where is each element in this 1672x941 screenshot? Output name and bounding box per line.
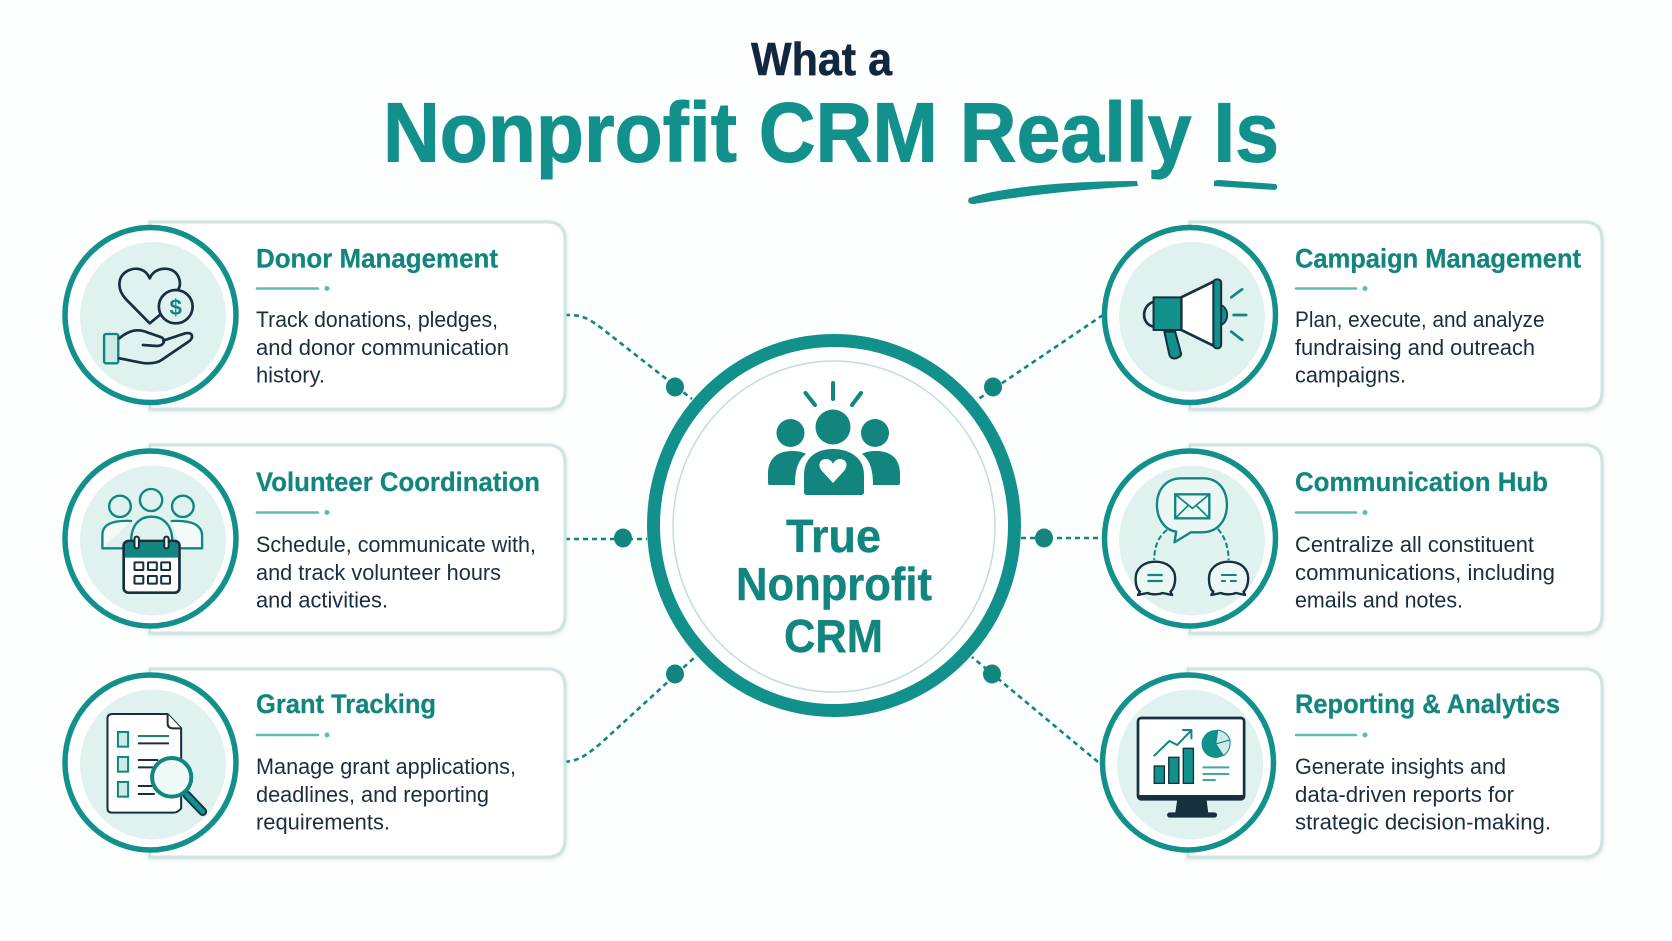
connector lines: [565, 315, 1103, 762]
icon: heart, coin and hand: [104, 269, 193, 363]
description: strategic decision-making.: [1295, 810, 1551, 834]
description: [1295, 532, 1555, 612]
description: campaigns.: [1295, 362, 1406, 388]
badge circle: [65, 675, 236, 850]
icon: people with heart: [768, 383, 900, 495]
heading: Campaign Management: [1295, 244, 1581, 274]
icon: volunteers and calendar: [102, 489, 202, 593]
card: [1188, 669, 1602, 857]
icon: heart, coin and hand: $: [170, 295, 182, 320]
badge circle: [1104, 451, 1276, 626]
description: and activities.: [256, 588, 388, 612]
hub inner ring: [673, 361, 995, 692]
description: communications, including: [1295, 560, 1555, 585]
central hub: [654, 340, 1014, 710]
description: and track volunteer hours: [256, 560, 501, 585]
description: Plan, execute, and analyze: [1295, 307, 1544, 332]
description: [256, 532, 536, 612]
badge circle: [1102, 675, 1274, 850]
description: Generate insights and: [1295, 754, 1506, 779]
hub outer ring: [654, 340, 1014, 710]
divider: [1296, 732, 1368, 738]
panel: campaign management: [1104, 222, 1602, 409]
badge tint: [80, 242, 226, 392]
divider: [257, 510, 330, 515]
heading: Reporting & Analytics: [1295, 689, 1560, 719]
description: [1295, 307, 1544, 388]
description: [256, 307, 509, 388]
description: data-driven reports for: [1295, 782, 1514, 807]
hub label: CRM: [784, 610, 883, 662]
description: history.: [256, 362, 325, 388]
icon: message bubbles: [1136, 478, 1248, 595]
badge tint: [80, 466, 226, 616]
badge tint: [1119, 466, 1265, 616]
card: [150, 222, 565, 409]
heading: Donor Management: [256, 244, 498, 274]
description: fundraising and outreach: [1295, 335, 1535, 360]
divider: [1296, 286, 1368, 291]
description: and donor communication: [256, 335, 509, 360]
badge tint: [1119, 242, 1265, 392]
panel: donor management: [65, 222, 565, 409]
hub label: Nonprofit: [736, 558, 932, 610]
description: Centralize all constituent: [1295, 532, 1535, 557]
badge circle: [1104, 228, 1276, 402]
divider: [257, 286, 330, 291]
heading: Volunteer Coordination: [256, 467, 540, 497]
title underline brush stroke: [968, 180, 1277, 204]
description: deadlines, and reporting: [256, 782, 489, 807]
description: [1295, 754, 1551, 834]
badge circle: [65, 228, 236, 402]
description: emails and notes.: [1295, 588, 1463, 612]
heading: Grant Tracking: [256, 689, 436, 719]
panel: communication hub: [1104, 445, 1602, 633]
card: [1190, 445, 1602, 633]
divider: [1296, 510, 1368, 515]
title line two: Nonprofit CRM Really Is: [383, 86, 1279, 180]
hub label: [736, 510, 932, 662]
icon: monitor with charts: [1138, 718, 1244, 818]
description: [256, 754, 516, 834]
badge tint: [1117, 690, 1263, 840]
title line one: What a: [751, 33, 892, 85]
description: Manage grant applications,: [256, 754, 516, 779]
description: requirements.: [256, 810, 390, 834]
hub label: True: [786, 510, 881, 562]
icon: checklist and magnifier: [107, 714, 203, 813]
card: [150, 669, 565, 857]
badge circle: [65, 451, 236, 626]
panel: reporting and analytics: [1102, 669, 1602, 857]
divider: [257, 732, 330, 738]
icon: megaphone: [1144, 279, 1246, 359]
connector nodes: [614, 378, 1053, 684]
badge tint: [80, 690, 226, 840]
panel: grant tracking: [65, 669, 565, 857]
title: [383, 33, 1279, 180]
heading: Communication Hub: [1295, 467, 1548, 497]
panel: volunteer coordination: [65, 445, 565, 633]
card: [1190, 222, 1602, 409]
card: [150, 445, 565, 633]
description: Track donations, pledges,: [256, 307, 498, 332]
description: Schedule, communicate with,: [256, 532, 536, 557]
